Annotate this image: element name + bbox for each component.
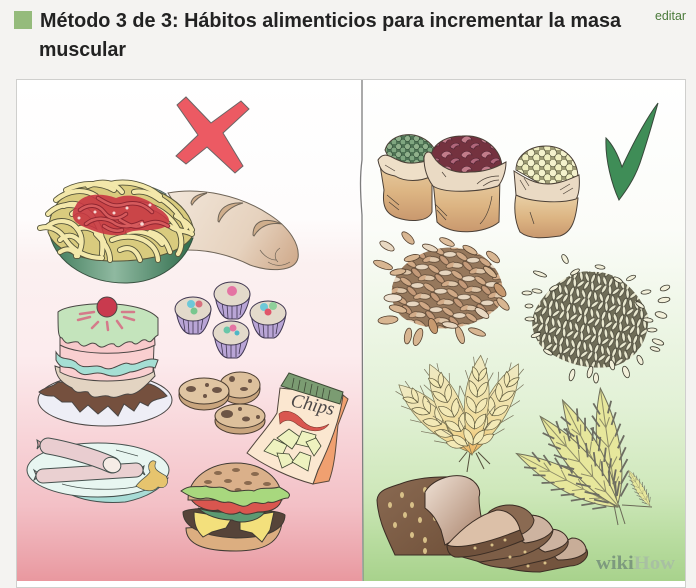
illustration: wheat bunch <box>386 354 535 472</box>
illustration: pile of oat grains <box>372 230 511 347</box>
heading marker: green square <box>14 11 32 29</box>
illustration: seeded bread loaf and slices <box>377 476 588 572</box>
panel: foods to avoid <box>17 80 362 581</box>
title: Método 3 de 3: Hábitos alimenticios para incrementar la masa <box>40 10 622 32</box>
divider between panels <box>360 80 363 581</box>
wikiHow watermark: wikiHow <box>596 553 675 574</box>
illustration: layered cake on plate <box>38 297 172 426</box>
chips label: Chips <box>289 390 336 420</box>
illustration: sack of green peas <box>378 135 434 220</box>
illustration: cupcakes <box>175 282 286 358</box>
illustration: bag of chips <box>247 373 348 484</box>
panel: foods to favour <box>364 80 685 581</box>
illustration: hamburger <box>181 463 290 551</box>
illustration: bowl of pasta <box>40 182 194 283</box>
icon: green check mark <box>606 103 658 200</box>
panel background: pink gradient <box>17 80 362 581</box>
illustration: cookies <box>179 372 265 434</box>
edit link: editar <box>655 8 687 23</box>
illustration: sausages on plate <box>27 440 169 502</box>
icon: red cross <box>176 97 249 173</box>
title: muscular <box>39 39 126 61</box>
illustration: pile of rice <box>522 253 671 383</box>
illustration: sack of pale peas <box>514 146 579 238</box>
illustration: baguette <box>168 191 298 270</box>
illustration: sack of red beans <box>424 136 506 232</box>
panel background: green gradient <box>364 80 685 581</box>
illustration: barley bunch <box>509 386 655 525</box>
